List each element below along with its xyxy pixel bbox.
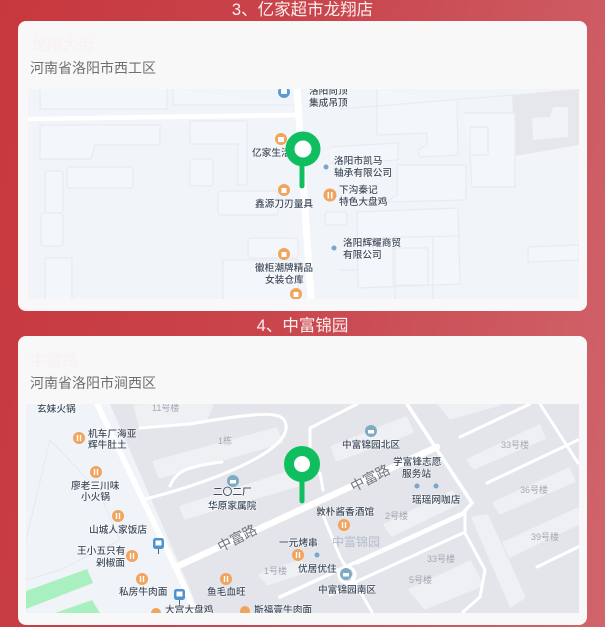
building labels: 33号楼 (501, 439, 529, 450)
poi labels: 王小五只有 (77, 544, 126, 557)
road labels: 中富路 (215, 521, 259, 555)
store name (faint): 中富路 (30, 353, 78, 370)
building labels: 2号楼 (385, 510, 408, 521)
address: 河南省洛阳市西工区 (30, 60, 156, 76)
address: 河南省洛阳市涧西区 (30, 375, 156, 391)
poi icons (73, 425, 438, 618)
poi labels: 徽柜潮牌精品 (255, 261, 313, 274)
building labels: 1号楼 (264, 565, 287, 576)
poi labels: 轴承有限公司 (334, 166, 392, 179)
location pin (289, 451, 315, 501)
poi labels: 山城人家饭店 (89, 523, 147, 536)
poi labels: 廖老三川味 (71, 479, 120, 492)
poi labels: 有限公司 (343, 248, 382, 261)
heading: 4: 4、中富锦园 (257, 317, 348, 335)
poi labels: 一元烤串 (279, 536, 318, 549)
poi labels: 私房牛肉面 (119, 585, 168, 598)
building labels: 5号楼 (409, 574, 432, 585)
building labels (152, 402, 559, 585)
store name (faint): 龙翔大街 (30, 37, 94, 54)
poi labels: 二〇二厂 (213, 486, 252, 498)
poi labels: 集成吊顶 (309, 96, 348, 109)
building labels: 中富锦园 (332, 534, 380, 549)
building labels: 36号楼 (520, 484, 548, 495)
poi labels: 洛阳市凯马 (334, 154, 382, 167)
panel: store 4 (18, 336, 587, 625)
poi icons (275, 86, 336, 300)
map: Xigong district (40, 89, 579, 299)
poi labels (37, 402, 461, 616)
panel: store 3 (18, 21, 587, 311)
poi labels: 下沟秦记 (339, 183, 378, 196)
poi labels: 服务站 (402, 467, 431, 480)
poi labels: 中富锦园南区 (318, 583, 376, 596)
poi labels: 优居优住 (298, 562, 337, 575)
poi labels: 中富锦园北区 (342, 438, 400, 451)
poi labels: 华原家属院 (208, 499, 257, 512)
poi labels: 鱼毛血旺 (207, 585, 246, 598)
map: Jianxi district (26, 404, 579, 613)
building labels: 33号楼 (427, 553, 455, 564)
location pin (290, 136, 316, 186)
poi labels: 瑶瑶网咖店 (412, 493, 461, 506)
poi labels: 敦朴酱香酒馆 (316, 505, 374, 518)
poi labels: 鑫源刀刃量具 (255, 197, 313, 210)
poi labels: 亿家生活 (252, 146, 291, 159)
road labels (215, 461, 392, 555)
poi labels: 女装仓库 (265, 273, 304, 286)
poi labels (252, 84, 401, 286)
building labels: 1栋 (218, 435, 232, 446)
building labels: 39号楼 (531, 531, 559, 542)
poi labels: 洛阳辉耀商贸 (343, 236, 401, 249)
poi labels: 剁椒面 (96, 556, 125, 569)
poi labels: 小火锅 (81, 490, 110, 503)
poi labels: 辉牛肚土 (88, 438, 127, 451)
poi labels: 机车厂海亚 (88, 427, 137, 440)
poi labels: 玄妹火锅 (37, 404, 76, 415)
road labels: 中富路 (348, 461, 392, 495)
heading: 3: 3、亿家超市龙翔店 (232, 1, 373, 19)
poi labels: 学富锋志愿 (393, 455, 442, 468)
poi labels: 特色大盘鸡 (339, 195, 388, 208)
